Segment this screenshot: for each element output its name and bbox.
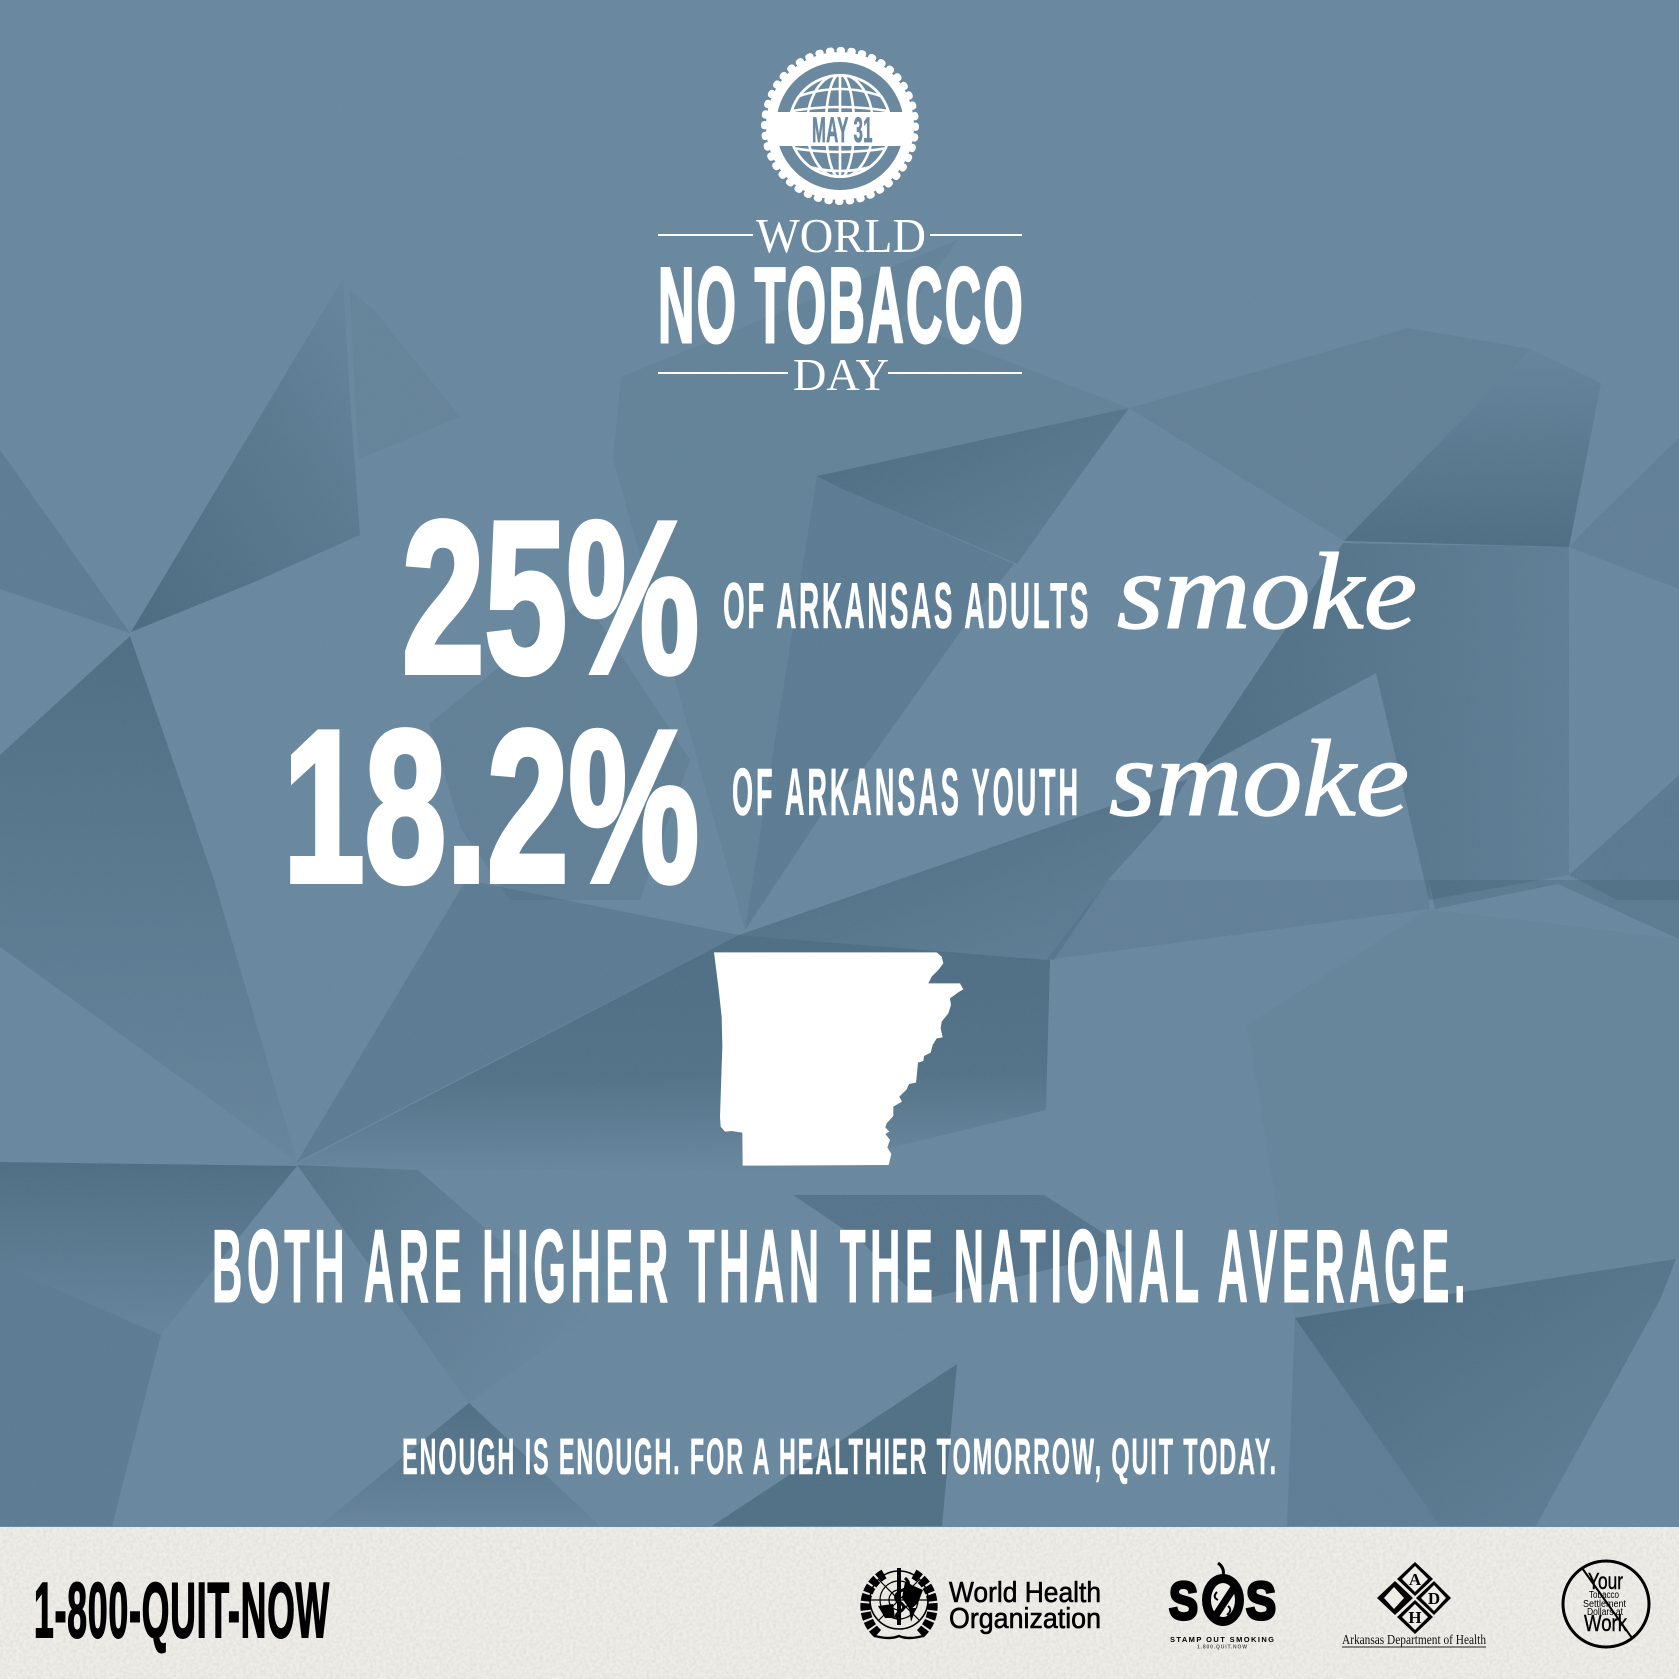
text: 1-800-QUIT-NOW <box>34 1566 330 1654</box>
logo: Your Tobacco Settlement Dollars at Work: Your <box>1588 1568 1623 1594</box>
logo: Stamp Out Smoking <box>1169 1563 1276 1650</box>
logo: Your Tobacco Settlement Dollars at Work: Settlement <box>1583 1599 1626 1610</box>
title: World No Tobacco Day: DAY <box>793 349 889 400</box>
logo: May 31 globe badge: MAY 31 <box>812 111 873 150</box>
logo: World Health Organization <box>865 1568 1101 1638</box>
text: World Health Organization: World Health <box>949 1577 1101 1609</box>
stat: 25% of Arkansas adults smoke <box>402 476 1417 718</box>
logo: Your Tobacco Settlement Dollars at Work: Dollars at <box>1587 1607 1623 1618</box>
logo: May 31 globe badge <box>764 50 916 202</box>
logo: Arkansas Department of Health: H <box>1408 1608 1422 1627</box>
logo: Arkansas Department of Health: D <box>1428 1589 1440 1608</box>
text: World Health Organization <box>949 1577 1101 1635</box>
stat: 25% of Arkansas adults smoke: 25% <box>402 476 699 718</box>
title: World No Tobacco Day: WORLD <box>756 208 926 263</box>
logo: Your Tobacco Settlement Dollars at Work <box>1563 1561 1649 1647</box>
stat: 18.2% of Arkansas youth smoke: smoke <box>1109 718 1409 839</box>
logo: Your Tobacco Settlement Dollars at Work: Tobacco <box>1589 1590 1619 1601</box>
title: World No Tobacco Day <box>658 208 1025 400</box>
logo: Stamp Out Smoking: S <box>1246 1572 1276 1631</box>
text: department name: Arkansas Department of Health <box>1342 1633 1486 1648</box>
icon: Arkansas state map <box>714 952 963 1166</box>
logo: Your Tobacco Settlement Dollars at Work: Work <box>1584 1610 1627 1636</box>
text: NO TOBACCO <box>658 245 1025 365</box>
stat: 18.2% of Arkansas youth smoke: 18.2% <box>283 685 699 927</box>
text: World Health Organization: Organization <box>949 1603 1101 1635</box>
logo: Stamp Out Smoking: S <box>1169 1572 1198 1631</box>
logo: Stamp Out Smoking: 1.800.QUIT.NOW <box>1197 1644 1247 1650</box>
stat: 18.2% of Arkansas youth smoke: OF ARKANSAS YOUTH <box>732 755 1081 830</box>
stat: 18.2% of Arkansas youth smoke <box>283 685 1409 927</box>
logo: Arkansas Department of Health: A <box>1409 1570 1422 1589</box>
logo: Stamp Out Smoking: STAMP OUT SMOKING <box>1170 1635 1274 1644</box>
stat: 25% of Arkansas adults smoke: OF ARKANSAS ADULTS <box>723 569 1091 642</box>
stat: 25% of Arkansas adults smoke: smoke <box>1117 531 1417 652</box>
footer band <box>0 1527 1679 1679</box>
logo: Arkansas Department of Health <box>1342 1562 1486 1648</box>
